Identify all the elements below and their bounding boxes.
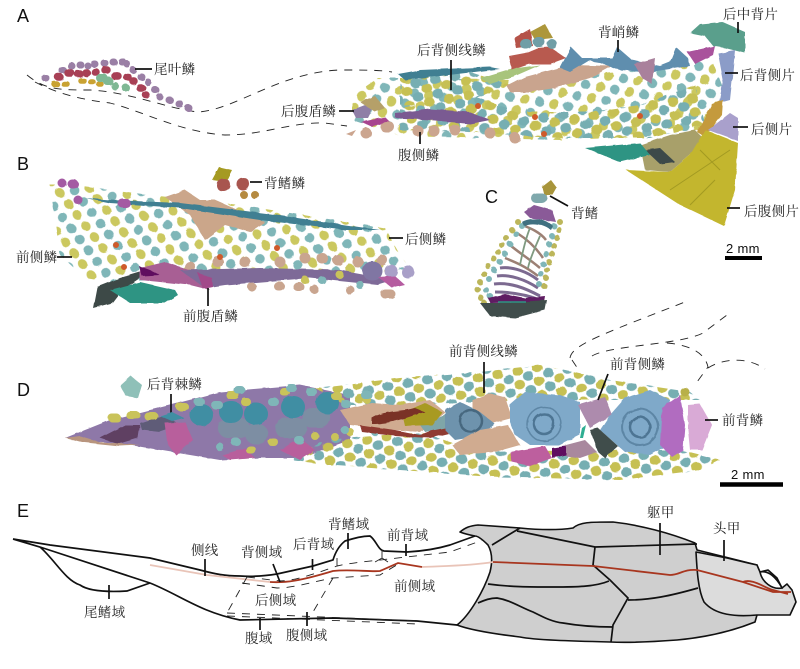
blue rosette scale 2 [510, 392, 580, 445]
panel letter D: D [17, 380, 30, 400]
teal spine scales [201, 403, 328, 415]
anterior ventral scutes: 前腹盾鳞 [183, 308, 238, 324]
teal sliver [580, 425, 586, 438]
dorsal band [85, 198, 380, 230]
grey scales [228, 418, 320, 434]
orange plate [697, 100, 723, 137]
posterior dorsolateral plate [718, 50, 795, 103]
tail fin region label: 尾鳍域 [84, 605, 126, 620]
blue rosette scale 1 [445, 402, 495, 440]
lateral line label: 侧线 [191, 542, 219, 558]
panel letter C: C [485, 187, 498, 207]
posterior dorsal spine scale detached: 后背棘鳞 [147, 376, 202, 392]
posterior dorsal spine scale detached [120, 376, 202, 414]
posterior purple scales [372, 262, 373, 280]
dorsal fin region label: 背鳍域 [328, 516, 370, 532]
posterior median dorsal plate [690, 6, 778, 53]
dorsal fin scales with label: 背鳍鳞 [264, 175, 306, 191]
posterior ventrolateral plate: 后腹侧片 [744, 203, 799, 219]
trunk armor label [647, 505, 675, 555]
posterior lateral plate [708, 113, 792, 141]
ventrolateral region label [286, 612, 328, 643]
bottom yellow scales [305, 275, 340, 280]
posterior dorsal region label [293, 536, 335, 570]
pink lower scutes [222, 438, 315, 460]
panel letter E: E [17, 501, 29, 521]
yellow top scales [112, 392, 367, 418]
anterior dorsolateral scale with label [578, 356, 665, 428]
scale bar [720, 467, 783, 484]
posterior median dorsal plate: 后中背片 [723, 6, 778, 22]
grey scute [140, 415, 180, 432]
plate sutures [478, 528, 698, 642]
dorsal fin scales with label [212, 167, 306, 195]
ventral region label [245, 618, 273, 646]
panel D: dorsal view [17, 302, 783, 484]
bottom scale row [252, 286, 391, 294]
anterior dorsal scale with label [688, 404, 764, 450]
lateral line red [270, 562, 791, 594]
tail tan patches [65, 436, 140, 446]
bottom teal scales [322, 280, 360, 285]
tan central scales [340, 400, 445, 432]
head armor [696, 552, 796, 616]
posterior dorsolateral label: 后背侧线鳞 [417, 42, 486, 58]
ventral lateral scales [346, 127, 515, 163]
dense anterior scales [400, 72, 510, 106]
anterior pink scales [62, 183, 126, 203]
posterior ventral scutes: 后腹盾鳞 [281, 103, 336, 119]
anterior dorsal region label [387, 527, 429, 556]
dorsal fin scale and label: 背鳍 [571, 205, 599, 221]
dorsal scale band [398, 46, 715, 92]
scale field [290, 365, 720, 480]
anterior lateral region label: 前侧域 [394, 579, 436, 594]
dark purple scale [552, 446, 566, 458]
tail lobe scales [45, 61, 196, 108]
posterior pale scales [391, 271, 408, 272]
dorsal fin region label [328, 516, 370, 549]
body outline [13, 536, 475, 625]
region dashes [227, 540, 483, 624]
scale bar: 2 mm [726, 241, 760, 256]
anterior lateral scale label: 前侧鳞 [16, 249, 58, 265]
panel letter A: A [17, 6, 29, 26]
lower mid yellow scales [250, 432, 350, 450]
head outline dashed [570, 302, 765, 382]
tail purple scutes [100, 425, 140, 444]
anterior tan scales with label: 前背侧线鳞 [449, 343, 518, 359]
ventral lateral scales: 腹侧鳞 [398, 147, 440, 163]
dorsolateral region label [241, 544, 283, 582]
anterior dorsal scale with label: 前背鳞 [722, 412, 764, 428]
lower mid teal scales [220, 430, 375, 447]
tail label [135, 68, 152, 70]
mauve scale [566, 440, 597, 458]
small teal scale [160, 412, 184, 421]
dorsal ridge label: 背峭鳞 [598, 24, 640, 40]
panel A: lateral view of posterior body [17, 6, 799, 258]
dark base [480, 300, 547, 318]
teal plate [585, 143, 650, 162]
dark plate [93, 272, 140, 308]
anterior ventral scutes [139, 262, 395, 324]
trunk armor label: 躯甲 [647, 505, 675, 520]
posterior lateral plate: 后侧片 [751, 121, 792, 137]
pink scale [510, 446, 552, 466]
teal band [522, 219, 553, 230]
posterior dorsal region label: 后背域 [293, 536, 335, 552]
teal ring scales [486, 226, 554, 296]
purple band [524, 205, 556, 222]
bottom band [488, 294, 545, 303]
orange dots [478, 106, 640, 134]
posterior dorsolateral label [417, 42, 486, 90]
ventral region label: 腹域 [245, 631, 273, 646]
posterior lateral scale label: 后侧鳞 [405, 231, 447, 247]
tail lobe scales: 尾叶鳞 [154, 61, 196, 77]
anterior tan scales with label [449, 343, 518, 424]
anterior dorsal region label: 前背域 [387, 527, 429, 543]
posterior lateral scale label [389, 231, 447, 247]
teal base stripe [498, 301, 526, 303]
posterior dorsolateral plate: 后背侧片 [740, 67, 795, 83]
inner fibres [494, 225, 546, 300]
tan plate [640, 130, 705, 172]
scale bar: 2 mm [731, 467, 765, 482]
anterior tan lower scales [452, 425, 520, 455]
panel C: cross-section [478, 180, 599, 318]
yellow rim scale [680, 388, 690, 396]
tail fin region label [84, 585, 126, 620]
tan scale row [190, 258, 382, 267]
dark plate detail [645, 148, 675, 164]
pink scutes [165, 422, 193, 455]
outer yellow scales [478, 222, 560, 303]
purple anterior scale [660, 395, 685, 457]
orange dots [116, 245, 277, 267]
lateral line label [191, 542, 219, 576]
head armor label [713, 520, 741, 561]
teal top scales [198, 388, 368, 405]
head armor label: 头甲 [713, 520, 741, 536]
posterior ventrolateral plate [626, 130, 799, 226]
blue rosette scale 3 [600, 390, 670, 455]
ventrolateral region label: 腹侧域 [286, 628, 328, 643]
lattice of lateral scales [352, 60, 724, 140]
dark grey scale [590, 428, 618, 458]
tail outline dashed [27, 70, 392, 135]
dorsal ridge label [598, 24, 640, 52]
dorsal fin scales [509, 24, 566, 70]
anterior dorsolateral scale with label: 前背侧鳞 [610, 356, 665, 372]
teal plate [110, 282, 178, 303]
dense lower scale rows [400, 85, 705, 138]
dorsolateral region label: 背侧域 [241, 544, 283, 560]
trunk armor [457, 522, 757, 642]
base body [65, 385, 350, 460]
central nested scales [360, 403, 455, 438]
lateral line pale [150, 562, 493, 582]
posterior pink scale [378, 276, 405, 288]
panel letter B: B [17, 154, 29, 174]
posterior lateral region label: 后侧域 [255, 593, 297, 608]
anterior lateral scale label [16, 249, 72, 265]
lattice of lateral scales [50, 185, 410, 282]
tan dorsal scales [165, 190, 265, 240]
rostral notch [760, 572, 782, 588]
panel E: region diagram [13, 501, 796, 646]
panel B: flipped lateral view [16, 154, 447, 324]
posterior ventral scutes [281, 96, 490, 127]
